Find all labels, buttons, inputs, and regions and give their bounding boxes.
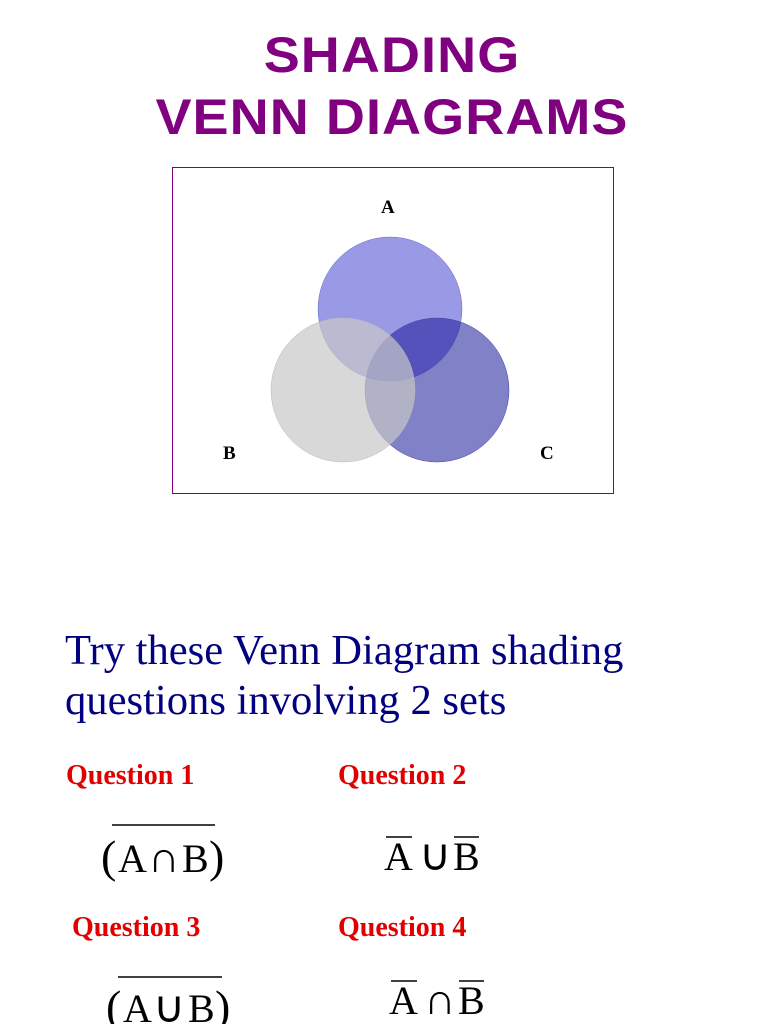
circle B (271, 318, 415, 462)
intro text: questions involving 2 sets (65, 677, 506, 724)
labels: B (223, 443, 236, 464)
formula 2: B (453, 834, 480, 879)
labels (223, 197, 554, 464)
formula 2: ∪ (419, 831, 451, 880)
labels: C (540, 443, 554, 464)
text: Question 4 (338, 912, 466, 943)
text: Question 3 (72, 912, 200, 943)
formula 1 (101, 825, 224, 882)
formula 1: ) (209, 831, 224, 882)
labels: A (381, 197, 395, 218)
formula 2 (384, 831, 480, 880)
formula 4: A (389, 978, 418, 1023)
formulas (101, 824, 485, 1024)
formula 4: B (458, 978, 485, 1023)
formula 4 (389, 975, 485, 1024)
title (155, 27, 629, 145)
intro text (65, 627, 623, 724)
formula 1: ∩ (148, 833, 180, 882)
formula 2: A (384, 834, 413, 879)
formula 1: A (118, 836, 147, 881)
formula 1: ( (101, 831, 116, 882)
text: Question 2 (338, 760, 466, 791)
formula 3 (106, 977, 230, 1024)
intro text: Try these Venn Diagram shading (65, 627, 623, 674)
formula 1: B (182, 836, 209, 881)
formula 4: ∩ (424, 975, 456, 1024)
question labels: Question 1 (66, 760, 194, 791)
circle C (365, 318, 509, 462)
title: SHADING (264, 27, 520, 83)
title: VENN DIAGRAMS (155, 89, 629, 145)
circle A (318, 237, 462, 381)
venn diagram panel (172, 167, 614, 494)
